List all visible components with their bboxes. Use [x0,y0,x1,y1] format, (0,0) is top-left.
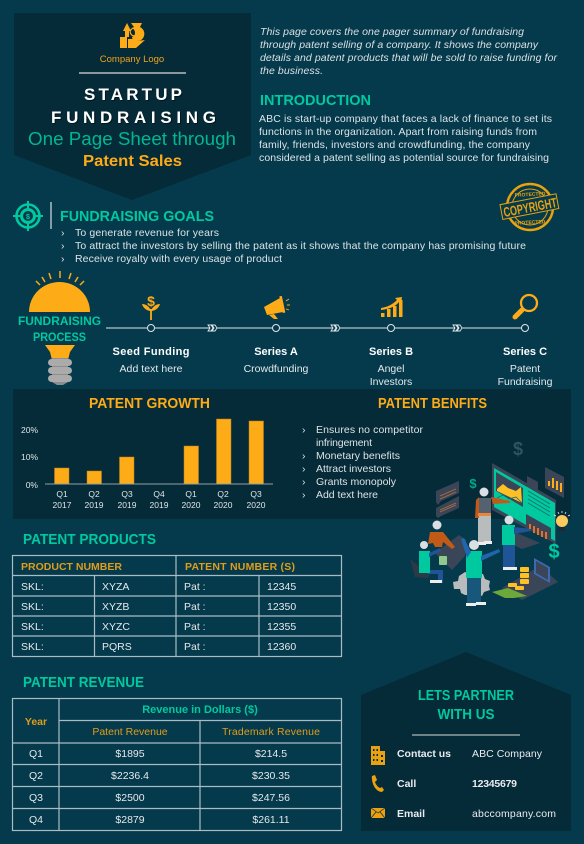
table rows: Pat : [184,601,206,613]
list: patent benefits: infringement [316,437,372,449]
table rows: SKL: [21,621,44,633]
icon: copyright stamp: PROTECTED [514,191,546,199]
text block: introduction: considered a patent selling as potential source for fundraising [259,152,549,164]
icon: copyright stamp [500,184,559,230]
heading: patent revenue: PATENT REVENUE [23,674,144,691]
bar chart: patent growth: 2019 [85,500,104,510]
icon: seed funding: $ [147,293,155,309]
table rows: $1895 [115,748,145,760]
icon: target coin [13,201,43,231]
list: fundraising goals: › [61,253,65,265]
laptop desk [502,566,558,600]
table: patent products [12,555,342,657]
panel: patent growth and benefits [13,389,571,519]
icon: seed funding [142,293,160,320]
list: patent benefits: Add text here [316,489,378,501]
table rows: SKL: [21,581,44,593]
heading: patent products: PATENT PRODUCTS [23,531,156,548]
list: fundraising goals: To generate revenue for years [75,227,219,239]
icon: rising bars [381,297,402,317]
table rows: $230.35 [252,770,290,782]
table: patent revenue [12,698,342,831]
standing presenter [475,488,510,545]
contact rows: Contact us [397,748,451,760]
table headers: Patent Revenue [92,726,168,738]
illustration: team at dashboard [410,439,570,606]
heading: patent growth: PATENT GROWTH [89,395,210,412]
table headers: Year [25,716,47,728]
table desk [435,535,466,570]
stage: series b: Investors [370,376,412,388]
heading: introduction: INTRODUCTION [260,92,371,109]
seated man [410,541,443,583]
table header row: PRODUCT NUMBER [21,561,122,573]
list: fundraising goals: › [61,240,65,252]
heading: lets partner [418,687,514,723]
table rows: $2500 [115,792,145,804]
text block: summary: through patent selling of a company. It shows the company [260,39,539,51]
table rows: PQRS [102,641,132,653]
contact rows [397,748,556,820]
icon: dollar signs: $ [513,439,523,459]
list: patent benefits [302,424,424,501]
contact rows: Email [397,808,425,820]
icon: dollar signs: $ [469,476,477,491]
list: fundraising goals [61,227,526,265]
gear [453,572,490,596]
list: patent benefits: Attract investors [316,463,391,475]
icon: dollar signs: $ [548,541,560,563]
table headers: Revenue in Dollars ($) [142,704,258,716]
heading: fundraising process: FUNDRAISING [18,314,101,328]
bar chart: patent growth: 2020 [247,500,266,510]
table rows: 12355 [267,621,296,633]
table rows: Pat : [184,581,206,593]
heading: lets partner: WITH US [438,706,494,723]
list: patent benefits: › [302,424,306,436]
stage: series c [498,346,553,388]
dashboard screen [492,463,556,544]
icon: light bulb with sun [29,271,90,385]
speech bubbles [436,481,459,518]
stage: series c: Fundraising [498,376,553,388]
bar chart: patent growth: 2020 [214,500,233,510]
man at table [428,520,455,565]
bar chart: patent growth: Q3 [250,489,262,499]
table rows: $247.56 [252,792,290,804]
table rows: XYZA [102,581,129,593]
table rows: $2236.4 [111,770,149,782]
bar chart: patent growth: Q2 [88,489,100,499]
list: patent benefits: › [302,450,306,462]
table header row [21,561,295,573]
stage: series c: Series C [503,346,547,358]
text block: introduction [259,113,552,164]
bar chart: patent growth [21,419,273,510]
table rows: XYZC [102,621,130,633]
list: patent benefits: › [302,489,306,501]
heading: patent benefits: PATENT BENFITS [378,395,487,412]
list: fundraising goals: › [61,227,65,239]
heading: fundraising process: PROCESS [33,330,86,344]
stage: seed funding [112,346,190,375]
center man [461,538,500,606]
heading: fundraising process [18,314,101,344]
table rows: $261.11 [252,814,290,826]
table rows: 12360 [267,641,296,653]
text block: summary [260,26,558,77]
list: patent benefits: › [302,476,306,488]
list: fundraising goals: To attract the investors by selling the patent as it shows that the company has promising future [75,240,526,252]
stage: series a: Crowdfunding [244,363,309,375]
text block: summary: the business. [260,65,323,77]
table rows: SKL: [21,641,44,653]
icon: megaphone [264,296,290,319]
contact rows: 12345679 [472,778,517,790]
process timeline [106,324,528,332]
list: patent benefits: Grants monopoly [316,476,397,488]
bar chart: patent growth: Q4 [153,489,165,499]
stage: series b: Angel [378,363,404,375]
list: patent benefits: Monetary benefits [316,450,400,462]
icon: building [371,746,385,765]
icon: idea bulb [554,511,570,531]
contact rows: abccompany.com [472,808,556,820]
panel: title banner [14,13,251,200]
icon: dollar signs [469,439,560,563]
table rows [21,581,296,653]
icon: company logo [120,23,145,48]
contact rows: ABC Company [472,748,543,760]
coins and money [492,567,529,598]
icon: phone [372,775,384,792]
bar chart: patent growth: Q2 [217,489,229,499]
table rows: Q3 [29,792,43,804]
table rows: 12350 [267,601,296,613]
stage: series b: Series B [369,346,413,358]
table rows: Q4 [29,814,43,826]
title: startup fundraising: FUNDRAISING [51,108,216,127]
icon: magnifier [515,295,537,317]
stage: series b [369,346,413,388]
stage: seed funding: Add text here [120,363,183,375]
table rows: $214.5 [255,748,287,760]
text block: summary: details and patent products that will be sold to raise funding for [260,52,558,64]
bar chart: patent growth: 2019 [150,500,169,510]
table rows: XYZB [102,601,129,613]
bar chart: patent growth: 2019 [118,500,137,510]
list: patent benefits: Ensures no competitor [316,424,424,436]
contact rows: Call [397,778,416,790]
subtitle: One Page Sheet through [28,129,236,149]
title: startup fundraising: STARTUP [84,85,182,104]
company logo label: Company Logo [100,54,164,65]
icon: copyright stamp: PROTECTED [514,219,546,227]
table rows [29,748,290,826]
bar chart: patent growth: 2017 [53,500,72,510]
text block: introduction: ABC is start-up company that faces a lack of finance to set its [259,113,552,125]
heading: fundraising goals: FUNDRAISING GOALS [60,208,214,225]
text block: introduction: family, friends, investors and crowdfunding, the company [259,139,531,151]
bar chart: patent growth: Q1 [56,489,68,499]
bar chart: patent growth: 2020 [182,500,201,510]
icon: envelope [371,808,385,818]
table rows: Q2 [29,770,43,782]
text block: introduction: functions in the organization. Apart from raising funds from [259,126,537,138]
icon: target coin: $ [26,212,31,221]
table rows: Pat : [184,621,206,633]
man by the screen [502,516,531,570]
list: fundraising goals: Receive royalty with every usage of product [75,253,282,265]
table rows: Q1 [29,748,43,760]
stage: series a [244,346,309,375]
subtitle highlight: Patent Sales [83,153,182,170]
table rows: Pat : [184,641,206,653]
stage: series c: Patent [510,363,540,375]
table rows: 12345 [267,581,296,593]
panel: lets partner with us [361,652,571,831]
bar chart: patent growth: 10% [21,452,38,462]
table header row: PATENT NUMBER (S) [185,561,295,573]
base under screen [505,530,540,549]
heading: lets partner: LETS PARTNER [418,687,514,704]
stage: seed funding: Seed Funding [112,346,190,358]
small chart card [545,467,564,498]
icon: copyright stamp: COPYRIGHT [502,195,559,220]
table rows: $2879 [115,814,145,826]
bar chart: patent growth: Q1 [185,489,197,499]
bar chart: patent growth: 0% [26,480,38,490]
title: startup fundraising [51,85,216,127]
bar chart: patent growth: Q3 [121,489,133,499]
table rows: SKL: [21,601,44,613]
stage: series a: Series A [254,346,298,358]
list: patent benefits: › [302,463,306,475]
table headers [25,704,320,738]
bar chart: patent growth: 20% [21,425,38,435]
table headers: Trademark Revenue [222,726,320,738]
text block: summary: This page covers the one pager summary of fundraising [260,26,524,38]
